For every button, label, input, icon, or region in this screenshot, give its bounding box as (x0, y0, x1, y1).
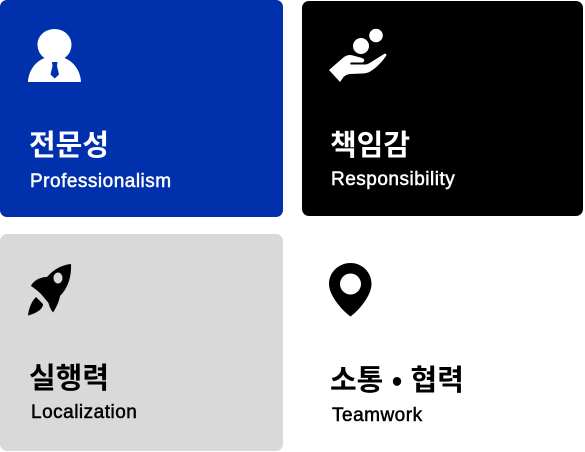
heading: 실행력: 실행력 (29, 355, 109, 397)
label: Responsibility: Responsibility (331, 169, 455, 190)
panel: teamwork (302, 234, 583, 451)
panel: responsibility (302, 1, 583, 216)
icon: map pin (329, 263, 372, 316)
label: Teamwork: Teamwork (332, 405, 423, 426)
label: Localization: Localization (31, 402, 137, 423)
icon: hand with coins (329, 28, 386, 82)
heading: 소통 • 협력: 소통 • 협력 (330, 357, 464, 399)
icon: rocket (28, 264, 72, 316)
heading: 책임감: 책임감 (330, 122, 410, 164)
panel: localization (0, 234, 283, 451)
label: Professionalism: Professionalism (30, 171, 172, 192)
icon: person with tie (28, 29, 81, 82)
heading: 전문성: 전문성 (29, 122, 109, 164)
panel: professionalism (0, 0, 283, 217)
